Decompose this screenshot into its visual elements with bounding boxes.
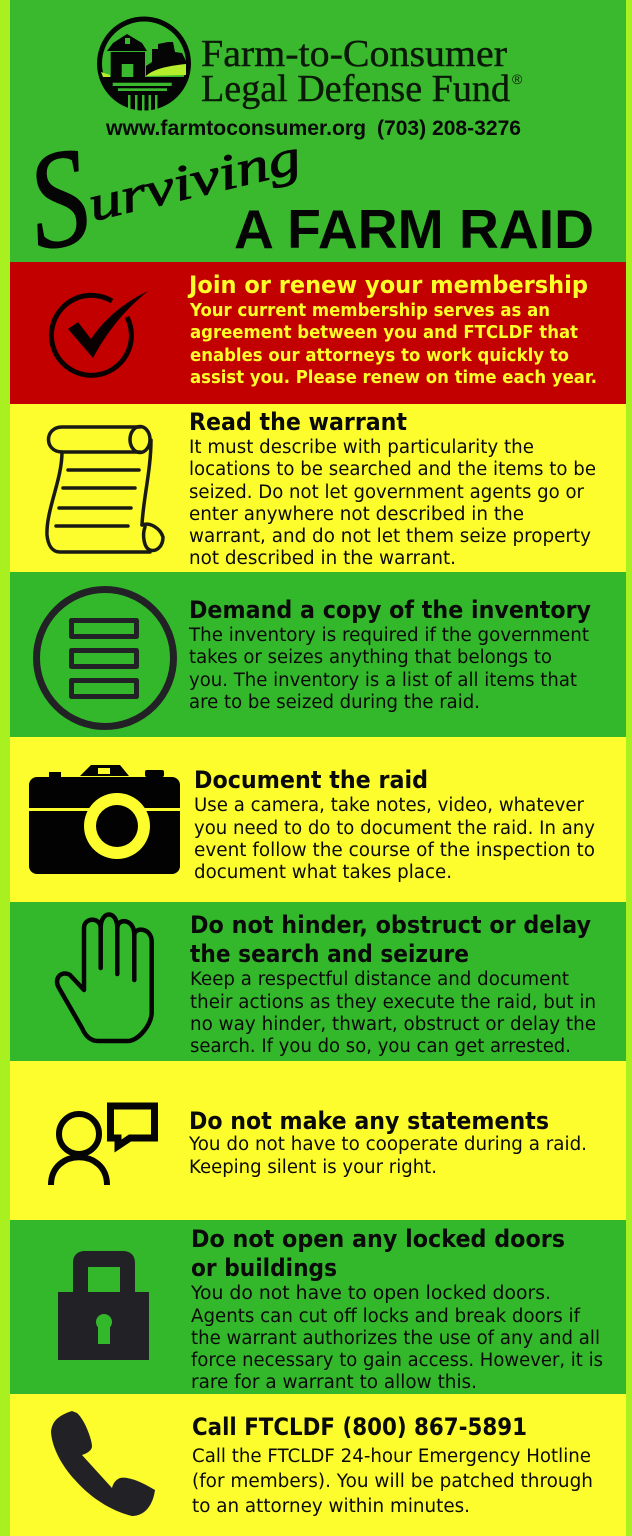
- panel: join or renew membership: [10, 262, 626, 404]
- body text: enables our attorneys to work quickly to: [190, 345, 569, 366]
- body text: are to be seized during the raid.: [189, 692, 480, 713]
- body text: document what takes place.: [194, 862, 452, 883]
- body text: event follow the course of the inspection to: [194, 840, 595, 861]
- heading: Call FTCLDF (800) 867-5891: [192, 1413, 527, 1441]
- body text: [188, 625, 589, 713]
- icon: person with speech bubble: [51, 1106, 154, 1185]
- body text: agreement between you and FTCLDF that: [190, 322, 578, 343]
- body text: Keeping silent is your right.: [189, 1157, 437, 1178]
- website and phone: (703) 208-3276: [377, 117, 521, 140]
- body text: [189, 437, 596, 569]
- panel: header: [10, 0, 626, 281]
- body text: enter anywhere not described in the: [189, 504, 524, 525]
- icon: scroll: [47, 426, 163, 552]
- body text: You do not have to cooperate during a raid.: [188, 1134, 587, 1155]
- icon: telephone handset: [51, 1411, 155, 1516]
- website and phone: www.farmtoconsumer.org: [105, 117, 366, 140]
- body text: (for members). You will be patched through: [192, 1471, 593, 1492]
- body text: assist you. Please renew on time each year.: [190, 367, 597, 388]
- body text: You do not have to open locked doors.: [190, 1283, 551, 1304]
- panel: do not open locked doors: [10, 1220, 626, 1394]
- heading: [190, 911, 591, 968]
- heading: Read the warrant: [189, 408, 407, 436]
- icon: camera: [29, 765, 180, 874]
- body text: [188, 1134, 587, 1178]
- heading: Do not hinder, obstruct or delay: [190, 911, 591, 939]
- icon: raised hand: [57, 914, 152, 1041]
- body text: [190, 1283, 603, 1393]
- body text: Agents can cut off locks and break doors if: [191, 1306, 580, 1327]
- heading: the search and seizure: [190, 940, 469, 968]
- panel: call FTCLDF: [10, 1394, 626, 1536]
- panel: read the warrant: [10, 404, 626, 572]
- title: Surviving: S: [16, 118, 101, 281]
- heading: Join or renew your membership: [187, 271, 588, 299]
- icon: FTCLDF barn logo: [96, 19, 192, 112]
- panel: document the raid: [10, 737, 626, 902]
- body text: rare for a warrant to allow this.: [191, 1372, 477, 1393]
- body text: warrant, and do not let them seize property: [189, 526, 591, 547]
- body text: Call the FTCLDF 24-hour Emergency Hotline: [192, 1446, 591, 1467]
- heading: or buildings: [191, 1254, 337, 1282]
- body text: no way hinder, thwart, obstruct or delay the: [190, 1014, 596, 1035]
- icon: check mark in circle: [51, 291, 148, 375]
- body text: seized. Do not let government agents go or: [189, 482, 584, 503]
- logo wordmark: Farm-to-Consumer: [201, 33, 507, 75]
- body text: the warrant authorizes the use of any and all: [191, 1328, 600, 1349]
- panel: do not hinder: [10, 902, 626, 1061]
- body text: [192, 1446, 593, 1517]
- heading: Do not open any locked doors: [191, 1225, 565, 1253]
- panel: do not make any statements: [10, 1061, 626, 1220]
- body text: The inventory is required if the government: [188, 625, 589, 646]
- body text: [194, 795, 595, 883]
- heading: Do not make any statements: [189, 1107, 549, 1135]
- body text: you need to do to document the raid. In any: [194, 818, 595, 839]
- body text: force necessary to gain access. However, it is: [191, 1350, 603, 1371]
- body text: search. If you do so, you can get arrested.: [190, 1036, 571, 1057]
- body text: not described in the warrant.: [189, 548, 456, 569]
- body text: It must describe with particularity the: [189, 437, 534, 458]
- logo wordmark: [201, 33, 523, 110]
- body text: their actions as they execute the raid, but in: [190, 992, 596, 1013]
- icon: inventory list in circle: [36, 590, 174, 726]
- panel: demand a copy of the inventory: [10, 572, 626, 737]
- body text: Your current membership serves as an: [189, 300, 550, 321]
- title: Surviving: urviving: [83, 128, 306, 232]
- heading: Document the raid: [194, 766, 428, 794]
- logo wordmark: ®: [512, 71, 523, 87]
- body text: to an attorney within minutes.: [192, 1496, 470, 1517]
- icon: padlock: [58, 1251, 149, 1360]
- body text: takes or seizes anything that belongs to: [189, 647, 552, 668]
- heading: Demand a copy of the inventory: [189, 596, 591, 624]
- body text: you. The inventory is a list of all items that: [189, 670, 577, 691]
- body text: [189, 300, 597, 388]
- logo wordmark: Legal Defense Fund: [201, 68, 510, 110]
- body text: locations to be searched and the items to be: [189, 459, 596, 480]
- website and phone: [105, 117, 521, 140]
- heading: [191, 1225, 565, 1282]
- title: Surviving: [16, 118, 306, 281]
- body text: Keep a respectful distance and document: [190, 969, 569, 990]
- body text: Use a camera, take notes, video, whatever: [194, 795, 584, 816]
- body text: [190, 969, 596, 1057]
- title: A FARM RAID: A FARM RAID: [234, 198, 594, 260]
